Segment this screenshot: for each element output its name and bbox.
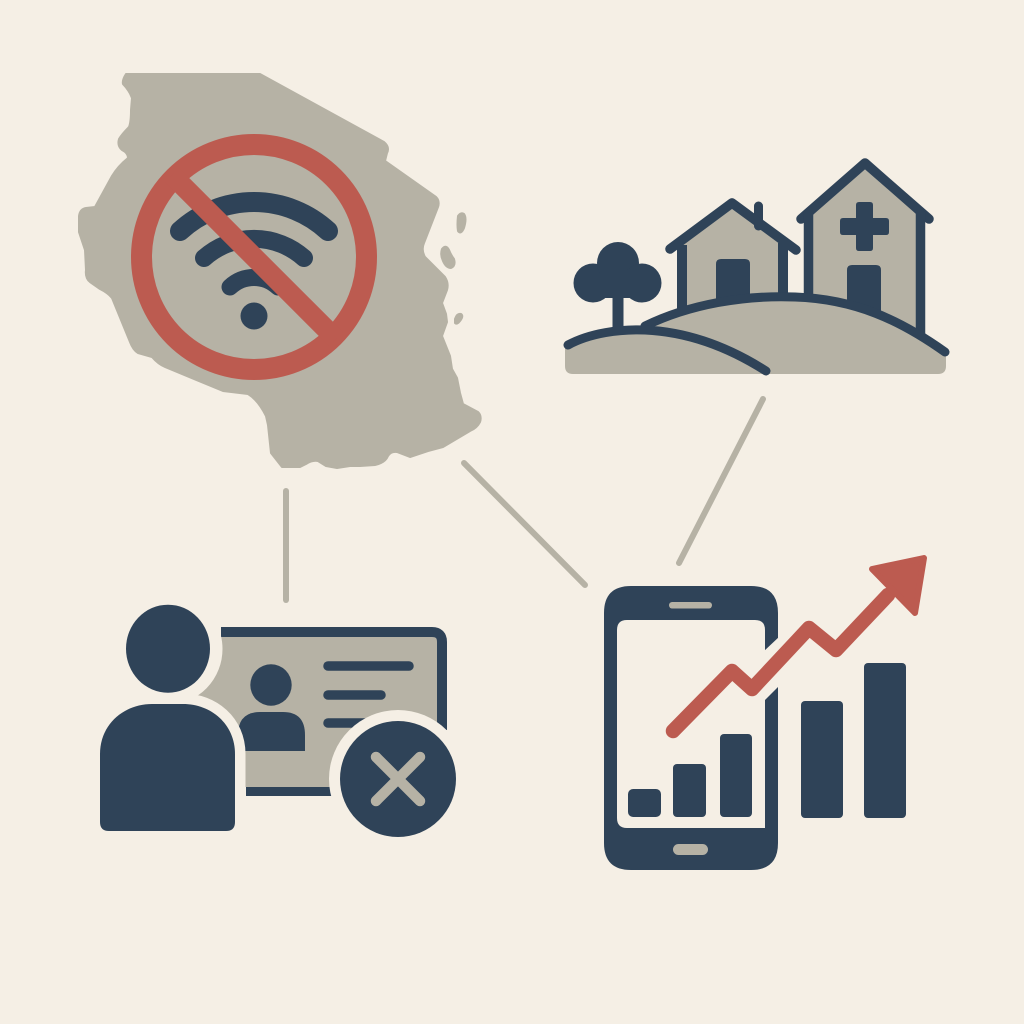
person halo: [100, 594, 235, 831]
connector: map to phone: [464, 463, 585, 585]
phone edge gap: [763, 636, 780, 702]
ID card: [195, 632, 442, 796]
ground fill: [565, 297, 946, 374]
connector: map to person: [283, 491, 289, 600]
icon: wifi arcs: [180, 202, 328, 287]
person figure: [100, 594, 235, 831]
smartphone with growth chart: [604, 558, 924, 870]
village with health clinic: [565, 163, 946, 374]
icon: prohibition sign: [142, 144, 366, 370]
bar chart: [628, 663, 906, 818]
trend arrow: [673, 558, 924, 731]
person head: [126, 605, 210, 693]
connector: village to phone: [679, 399, 763, 563]
clinic: [801, 163, 929, 336]
phone body: [604, 586, 778, 870]
person with rejected ID card: [100, 594, 467, 848]
card text lines: [328, 666, 409, 723]
map: country silhouette: [79, 74, 481, 468]
tree: [574, 242, 662, 330]
house: [670, 203, 796, 320]
card photo: [250, 664, 292, 706]
phone speaker: [669, 602, 712, 608]
hills outlines: [568, 297, 945, 371]
person body: [100, 704, 235, 831]
icon: X badge: [329, 710, 467, 848]
icon: medical cross: [840, 202, 889, 251]
map of Tanzania with no-wifi symbol: [79, 74, 481, 468]
phone home button: [673, 844, 708, 855]
icon: wifi dot: [240, 302, 268, 330]
